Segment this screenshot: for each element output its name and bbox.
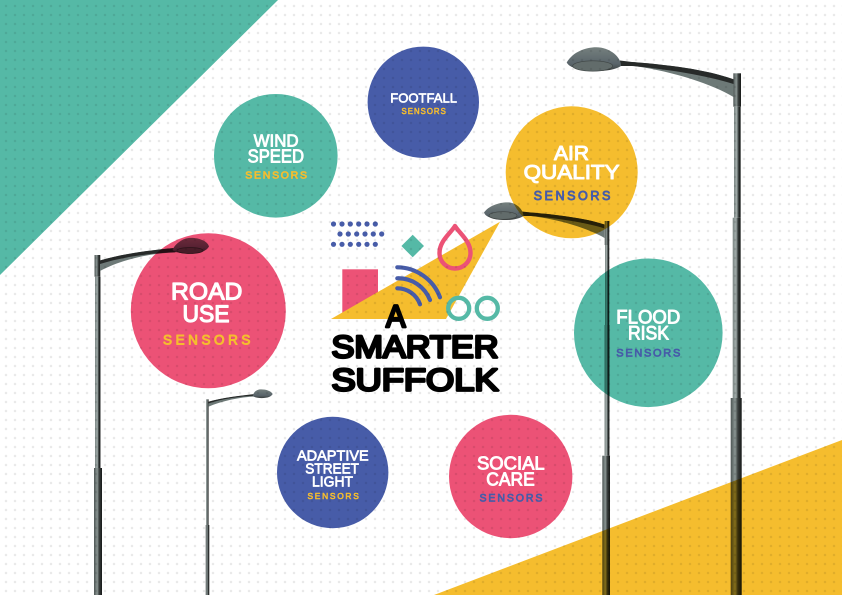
- lamp pole: [94, 255, 102, 595]
- label: flood risk: FLOOD: [616, 308, 680, 329]
- label: social care: SENSORS: [480, 493, 542, 505]
- yellow logo triangle: [331, 222, 500, 319]
- logo word: A: A: [386, 298, 406, 334]
- label: footfall: FOOTFALL: [390, 91, 457, 106]
- label: adaptive street light: STREET: [305, 462, 359, 478]
- label: adaptive street light: SENSORS: [308, 491, 359, 501]
- label: road use: ROAD: [171, 278, 242, 306]
- blue dot grid: [331, 221, 384, 247]
- label: air quality: [524, 142, 620, 203]
- label: footfall: [390, 91, 457, 116]
- label: social care: CARE: [486, 470, 535, 490]
- label: wind speed: [245, 130, 307, 181]
- label: air quality: AIR: [554, 142, 589, 165]
- label: social care: SOCIAL: [477, 454, 545, 474]
- icon: water drop: [440, 226, 470, 268]
- teal corner triangle: [0, 0, 278, 275]
- lamp arm: [522, 212, 604, 238]
- logo graphic shapes: [331, 221, 500, 319]
- lamp post: small: [206, 389, 273, 595]
- lamp pole: [731, 73, 742, 595]
- lamp post: left: [94, 238, 209, 595]
- lamp head: [172, 238, 209, 254]
- lamp post: middle: [484, 202, 610, 595]
- label: flood risk: [616, 308, 680, 359]
- label: road use: [163, 278, 250, 348]
- logo word: SUFFOLK: SUFFOLK: [332, 361, 498, 397]
- label: social care: [477, 454, 545, 505]
- circle: air quality: [506, 106, 638, 238]
- lamp arm: [620, 60, 734, 97]
- icon: wifi arcs: [397, 267, 440, 304]
- circle: wind speed: [214, 94, 338, 218]
- logo word: SMARTER: SMARTER: [332, 329, 498, 365]
- sensor circles: [131, 47, 723, 538]
- label: flood risk: SENSORS: [616, 347, 680, 359]
- lamp head: [567, 47, 621, 71]
- logo wordmark: [332, 298, 498, 397]
- teal diamond: [401, 235, 424, 257]
- label: wind speed: WIND: [254, 130, 299, 150]
- label: road use: SENSORS: [163, 333, 250, 348]
- label: wind speed: SPEED: [248, 146, 304, 166]
- circle: road use: [131, 233, 286, 388]
- lamp head: [253, 389, 273, 398]
- label: wind speed: SENSORS: [245, 169, 307, 181]
- label: adaptive street light: LIGHT: [312, 474, 353, 490]
- lamp arm: [208, 394, 255, 407]
- lamp arm: [100, 248, 180, 271]
- lamp post: top right: [567, 47, 742, 595]
- circle: social care: [449, 415, 572, 538]
- label: adaptive street light: ADAPTIVE: [297, 448, 369, 464]
- circle: footfall: [368, 47, 479, 158]
- lamp head: [484, 202, 524, 220]
- label: flood risk: RISK: [628, 324, 669, 345]
- lamp pole: [602, 221, 610, 595]
- label: road use: USE: [182, 301, 230, 328]
- label: adaptive street light: [297, 448, 369, 501]
- label: footfall: SENSORS: [402, 107, 446, 116]
- lamp pole: [206, 399, 209, 595]
- pink square: [342, 269, 378, 313]
- yellow corner triangle: [434, 440, 842, 595]
- teal rings: [448, 298, 498, 319]
- label: air quality: SENSORS: [534, 189, 610, 203]
- label: air quality: QUALITY: [524, 161, 620, 184]
- circle: flood risk: [574, 258, 723, 407]
- circle: adaptive street light: [277, 417, 388, 528]
